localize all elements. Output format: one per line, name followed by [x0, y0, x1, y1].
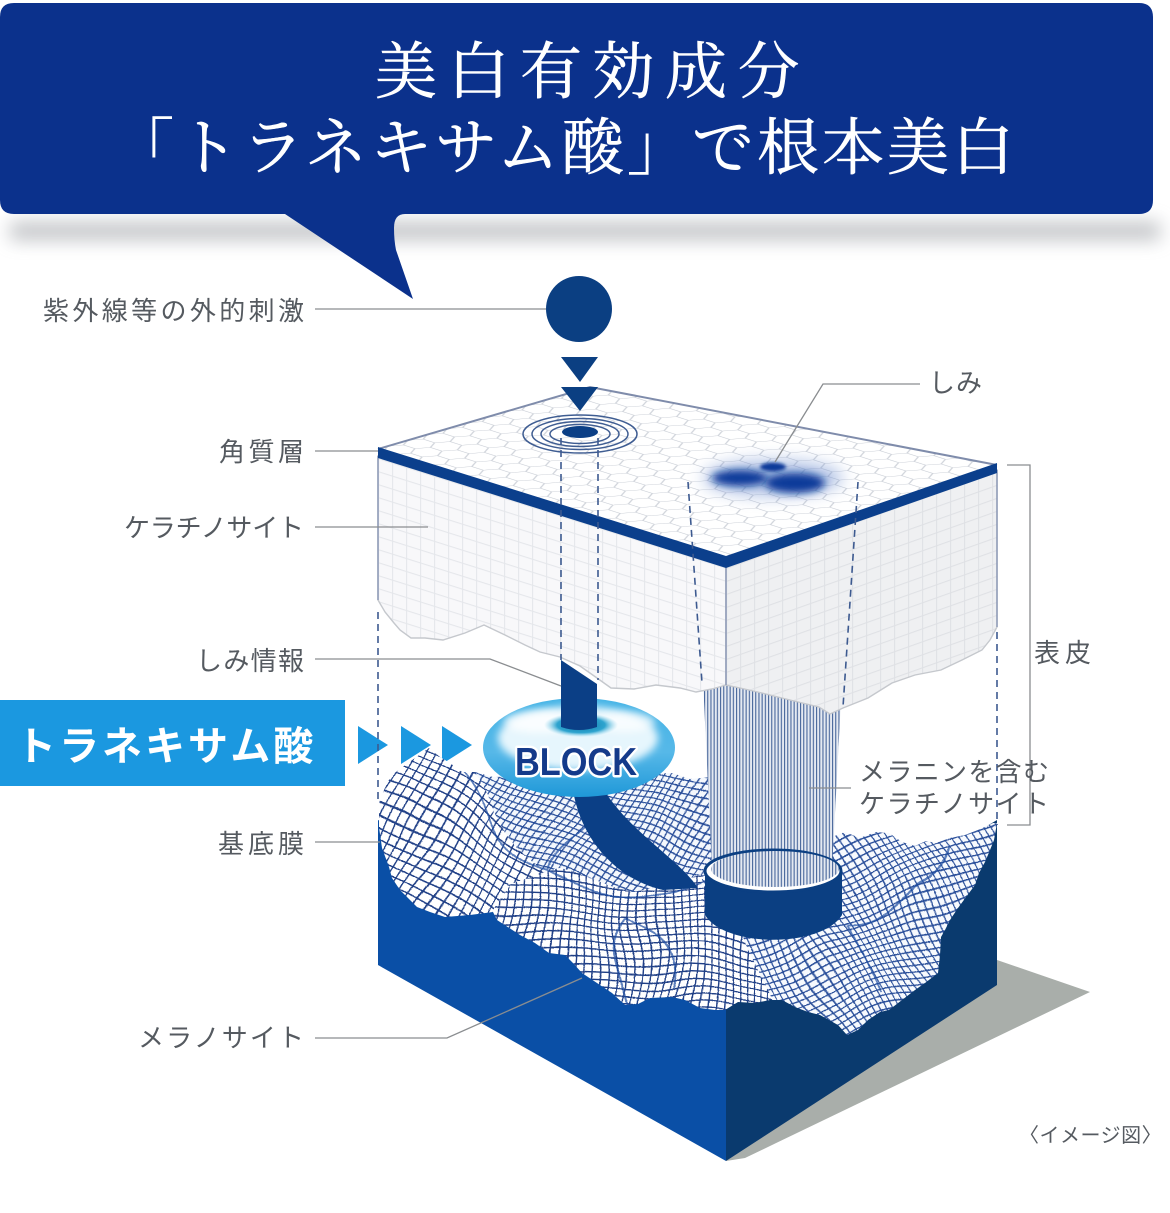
- pale ring body: [498, 706, 658, 770]
- label: spot signal: しみ情報: [196, 646, 304, 676]
- leader lines: [315, 309, 920, 1038]
- melanin transfer band: [573, 790, 698, 890]
- title speech bubble: [0, 3, 1153, 299]
- tranexamic acid banner: トラネキサム酸: [16, 725, 316, 769]
- downward arrows: [561, 357, 598, 411]
- title line 2: 「トラネキサム酸」で根本美白: [112, 115, 1017, 183]
- label: keratinocyte: ケラチノサイト: [124, 513, 304, 543]
- left face: [378, 820, 726, 1161]
- navy edge band: [378, 447, 997, 568]
- block ring (torus): [483, 660, 675, 797]
- spot on the skin: [703, 460, 843, 496]
- ring hole: [544, 713, 618, 737]
- stratum corneum top surface: [378, 387, 997, 568]
- label: melanocyte: メラノサイト: [138, 1023, 304, 1053]
- right face: [726, 820, 997, 1161]
- title line 1: 美白有効成分: [375, 39, 810, 107]
- tranexamic acid banner: [0, 700, 345, 786]
- label: keratinocytes containing melanin: メラニンを含む: [859, 757, 1049, 787]
- label: image note: 〈イメージ図〉: [1019, 1125, 1162, 1147]
- right side face: [726, 470, 997, 714]
- basement membrane mesh: [379, 748, 997, 1035]
- label: stratum corneum: 角質層: [219, 437, 304, 467]
- label: epidermis: 表皮: [1034, 638, 1091, 668]
- label: external stimulus: 紫外線等の外的刺激: [43, 296, 304, 326]
- label: keratinocytes containing melanin: [859, 757, 1049, 819]
- keratinocyte layer: [378, 456, 997, 714]
- label: spot: しみ: [929, 368, 982, 398]
- ripple rings at stimulus point: [523, 415, 637, 453]
- label: basement membrane: 基底膜: [218, 829, 304, 859]
- speech bubble shadow: [10, 222, 1160, 240]
- keratinocytes containing melanin column: [703, 680, 841, 870]
- ground shadow: [726, 960, 1090, 1161]
- melanocyte base block: [378, 820, 997, 1161]
- melanocyte cylinder: [705, 850, 842, 940]
- left side face: [378, 456, 726, 692]
- arrows toward block ring: [358, 726, 472, 764]
- epidermis bracket: [1007, 465, 1030, 825]
- melanin signal shaft: [561, 660, 597, 730]
- dashed guide lines: [378, 438, 997, 825]
- external stimulus circle: [546, 276, 612, 342]
- label: keratinocytes containing melanin: ケラチノサイト: [859, 789, 1049, 819]
- BLOCK text: BLOCK: [515, 741, 637, 784]
